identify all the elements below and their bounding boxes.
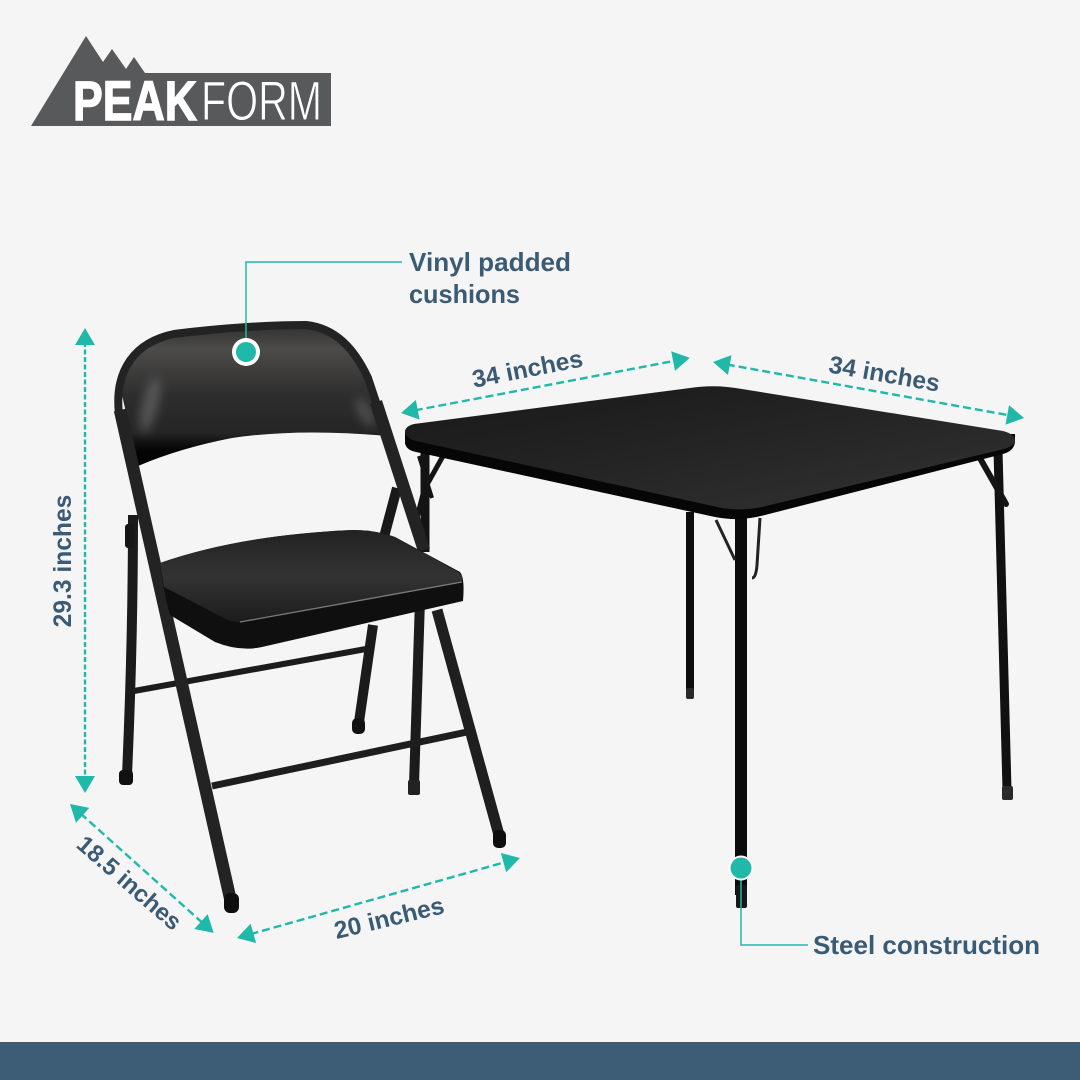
label: chair height: 29.3 inches [50,495,77,627]
logo: PeakForm: PEAK [73,69,197,132]
chair [118,325,506,913]
table right leg [981,450,1013,800]
arrow: table left side [399,348,692,423]
callout text: Steel construction [813,930,1040,960]
chair seat [160,530,464,649]
arrow: chair height [75,328,95,793]
logo: PeakForm [31,36,331,132]
chair cross bars [134,649,467,786]
callout: vinyl padded cushions [232,247,571,366]
label: chair depth: 18.5 inches [71,831,187,936]
callout text: Vinyl padded [409,247,571,277]
arrow: chair width [234,848,523,948]
table [405,386,1015,908]
logo: PeakForm: FORM [201,69,322,132]
table top [405,386,1015,519]
chair frame [118,325,506,913]
label: chair width: 20 inches [332,892,447,945]
callout dot [728,856,754,880]
table left legs and brace [416,450,443,552]
table rear leg [686,512,694,699]
callout leader line [246,262,402,340]
callout dot [232,338,260,366]
arrow: chair depth [63,797,220,940]
callout: steel construction [728,856,1040,960]
callout leader line [741,880,808,945]
label: table left side: 34 inches [470,346,585,394]
arrow: table right side [711,352,1026,428]
chair backrest [122,327,387,466]
label: table right side: 34 inches [827,352,942,398]
chair rear legs [119,488,420,795]
callout text second line: cushions [409,279,520,309]
table front leg [716,515,760,908]
footer bar [0,1042,1080,1080]
